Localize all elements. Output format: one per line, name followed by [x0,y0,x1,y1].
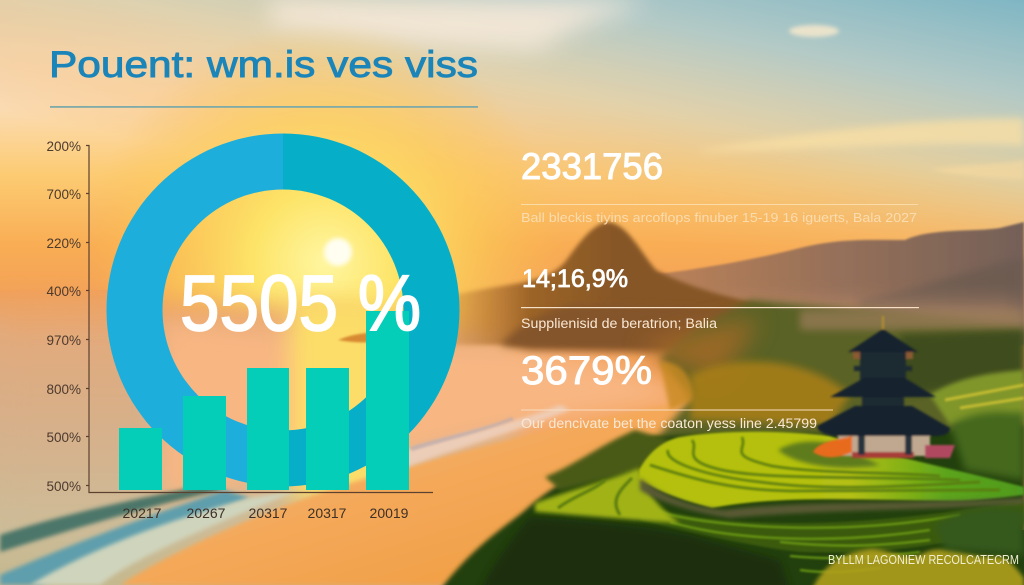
title rule [50,106,478,108]
x axis labels: 20317 [249,505,288,521]
y axis labels [46,139,81,494]
y axis labels: 700% [46,187,81,202]
jungle [1020,530,1024,585]
x axis labels: 20217 [123,505,162,521]
upper terraces [639,432,1024,508]
small orange cloud smear [338,332,366,344]
ring: left half [106,134,283,486]
chart: donut with bars [46,134,459,521]
stat 3 [521,349,833,431]
title: Pouent: wm.is ves viss [49,44,478,85]
wet sand glow [160,320,692,500]
y axis labels: 500% [46,479,81,494]
stat 1: Ball bleckis tiyins arcoflops finuber 15-19 16 iguerts, Bala 2027 [521,210,917,225]
sand [121,406,672,585]
y axis labels: 500% [46,430,81,445]
stat 3: 3679% [521,349,652,393]
stat 1 [521,146,918,225]
x axis labels [123,505,409,521]
main peak and hill [456,219,754,348]
waves [0,484,225,552]
axes [86,146,433,492]
x axis labels: 20019 [370,505,409,521]
y axis labels: 800% [46,382,81,397]
lower terraces [640,500,1024,553]
icon: pagoda temple [813,316,955,458]
center value: 5505 % [180,258,421,347]
shoreline foam [400,405,570,468]
stat 1: 2331756 [521,146,663,187]
stat 2: Supplienisid de beratrion; Balia [521,316,718,331]
sun highlight [324,238,352,266]
y axis labels: 200% [46,139,81,154]
x axis labels: 20267 [187,505,226,521]
y axis labels: 970% [46,333,81,348]
left terrace [535,468,680,523]
stat 2 [521,265,919,331]
x axis labels: 20317 [308,505,347,521]
sea [0,290,150,585]
stat 2: 14;16,9% [522,265,628,293]
forest [653,300,1024,500]
bars [119,311,409,490]
ring: right half [283,134,459,486]
dark cliff [480,517,790,585]
stat 3: Our dencivate bet the coaton yess line 2.45799 [521,416,817,431]
far ridge [650,222,1024,345]
y axis labels: 400% [46,284,81,299]
y axis labels: 220% [46,236,81,251]
yellow foliage [812,549,1024,585]
stone wall [640,478,1024,518]
